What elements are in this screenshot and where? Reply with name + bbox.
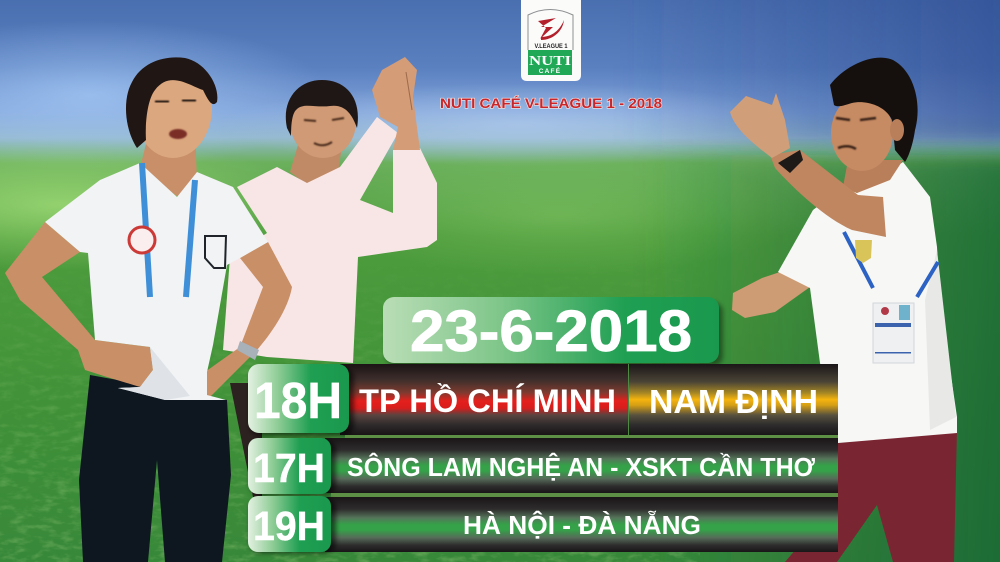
person: coach with hands on hips bbox=[5, 57, 292, 562]
pocket bbox=[205, 236, 226, 268]
trousers bbox=[230, 383, 262, 500]
wrist watch bbox=[778, 150, 803, 173]
person: coach with raised clapping hands bbox=[223, 57, 437, 500]
mouth bbox=[169, 129, 187, 139]
watch bbox=[237, 341, 259, 360]
neck bbox=[140, 130, 197, 197]
person: coach gesturing on the right bbox=[730, 58, 957, 562]
divider bbox=[628, 364, 629, 435]
shirt bbox=[778, 162, 957, 443]
accreditation badge bbox=[873, 303, 914, 363]
hair bbox=[286, 80, 358, 136]
NUTI wordmark: NUTI bbox=[529, 54, 571, 69]
fixture row: 19H bbox=[248, 493, 838, 553]
facial features bbox=[836, 118, 876, 149]
face bbox=[290, 86, 356, 158]
league swoosh mark bbox=[538, 18, 564, 40]
right arm bbox=[205, 242, 292, 400]
face bbox=[134, 58, 212, 158]
neck bbox=[843, 160, 903, 193]
lanyard left bbox=[142, 163, 150, 297]
left arm bbox=[5, 222, 153, 387]
time: 18H bbox=[254, 372, 342, 429]
shirt bbox=[45, 163, 268, 400]
bar: away team bbox=[628, 364, 838, 435]
fixture row: 18H bbox=[248, 364, 838, 436]
date: 23-6-2018 bbox=[410, 299, 692, 364]
home team: TP HỒ CHÍ MINH bbox=[359, 383, 616, 419]
lower arm bbox=[732, 272, 810, 318]
time pill bbox=[248, 364, 349, 433]
time pill bbox=[248, 496, 331, 552]
trousers bbox=[785, 430, 957, 562]
match: SÔNG LAM NGHỆ AN - XSKT CẦN THƠ bbox=[347, 452, 816, 482]
green sponsor block bbox=[528, 50, 572, 75]
clapping hands bbox=[372, 57, 420, 150]
league name: V.LEAGUE 1 bbox=[534, 44, 568, 50]
neck bbox=[290, 140, 343, 187]
bar bbox=[325, 438, 838, 493]
shirt bbox=[223, 117, 437, 363]
time pill bbox=[248, 438, 331, 494]
raised forearm bbox=[770, 150, 886, 237]
time: 19H bbox=[253, 503, 325, 549]
ear bbox=[890, 119, 904, 141]
time shadow bbox=[250, 367, 354, 436]
time: 17H bbox=[253, 445, 325, 491]
face bbox=[831, 95, 893, 171]
logo card bbox=[521, 0, 581, 81]
trousers bbox=[79, 375, 231, 562]
finger line bbox=[406, 72, 412, 110]
club crest bbox=[855, 240, 872, 263]
away team: NAM ĐỊNH bbox=[649, 383, 818, 420]
club crest bbox=[129, 227, 155, 253]
hair bbox=[126, 57, 217, 148]
bar: home team bbox=[340, 364, 628, 435]
eyes bbox=[155, 100, 196, 102]
fixture row: 17H bbox=[248, 435, 838, 495]
time shadow bbox=[250, 498, 336, 553]
shirt shading bbox=[925, 250, 956, 430]
CAFÉ wordmark: CAFÉ bbox=[539, 66, 561, 75]
time shadow bbox=[250, 440, 336, 495]
bar bbox=[325, 497, 838, 552]
separator line bbox=[331, 493, 838, 497]
separator line bbox=[345, 435, 838, 438]
match: HÀ NỘI - ĐÀ NẴNG bbox=[463, 510, 701, 540]
lanyard bbox=[844, 232, 938, 297]
lanyard right bbox=[186, 180, 195, 297]
raised hand bbox=[730, 93, 790, 158]
hair bbox=[830, 58, 918, 162]
date panel bbox=[383, 297, 723, 366]
facial features bbox=[304, 118, 344, 145]
logo: V.League 1 Nuti Café bbox=[521, 0, 581, 81]
shirt shading bbox=[118, 347, 190, 400]
league caption: NUTI CAFÉ V-LEAGUE 1 - 2018 bbox=[440, 95, 662, 111]
shield outline bbox=[528, 10, 573, 50]
